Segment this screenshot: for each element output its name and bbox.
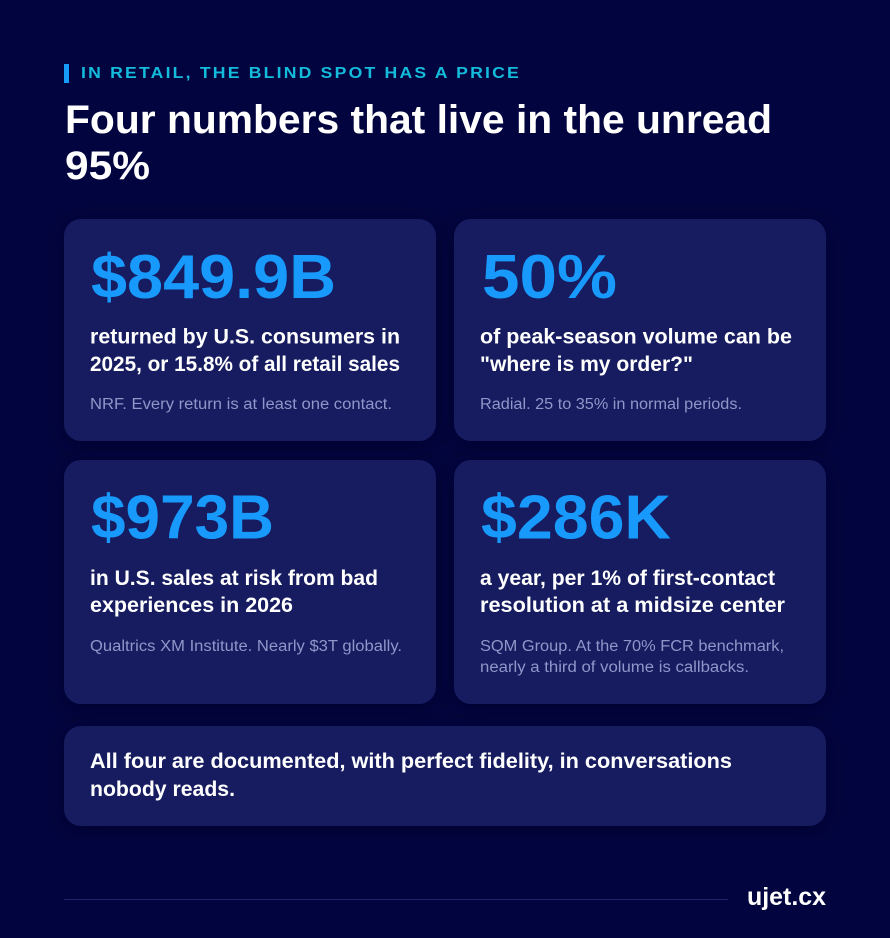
stat number: $849.9B bbox=[91, 243, 336, 312]
source note: nearly a third of volume is callbacks. bbox=[480, 659, 749, 676]
description bbox=[90, 566, 378, 617]
description: a year, per 1% of first-contact bbox=[480, 566, 775, 590]
description: in U.S. sales at risk from bad bbox=[90, 566, 378, 590]
source note: Radial. 25 to 35% in normal periods. bbox=[480, 396, 742, 413]
source note bbox=[480, 638, 784, 676]
source note: NRF. Every return is at least one contact. bbox=[90, 396, 392, 413]
panel: closing statement: nobody reads. bbox=[90, 777, 235, 801]
title: 95% bbox=[65, 144, 150, 188]
title bbox=[65, 98, 772, 188]
stat number: 50% bbox=[482, 243, 617, 312]
source note: SQM Group. At the 70% FCR benchmark, bbox=[480, 638, 784, 655]
description bbox=[480, 324, 792, 376]
panel: returns stat bbox=[64, 219, 436, 441]
panel: closing statement: All four are documented, with perfect fidelity, in conversations bbox=[90, 749, 732, 773]
description: of peak-season volume can be bbox=[480, 324, 792, 348]
description: resolution at a midsize center bbox=[480, 593, 786, 617]
panel: closing statement bbox=[64, 726, 826, 826]
panel: peak-season stat bbox=[454, 219, 826, 441]
description: "where is my order?" bbox=[480, 352, 693, 376]
stat number: $286K bbox=[481, 484, 671, 552]
logo: ujet.cx bbox=[747, 883, 826, 911]
stat number: $973B bbox=[91, 484, 274, 552]
description: returned by U.S. consumers in bbox=[90, 324, 400, 348]
description bbox=[90, 324, 400, 376]
description bbox=[480, 566, 786, 617]
eyebrow: IN RETAIL, THE BLIND SPOT HAS A PRICE bbox=[81, 65, 521, 82]
title: Four numbers that live in the unread bbox=[65, 98, 772, 142]
description: 2025, or 15.8% of all retail sales bbox=[90, 352, 400, 376]
panel: sales at risk stat bbox=[64, 460, 436, 704]
source note: Qualtrics XM Institute. Nearly $3T globally. bbox=[90, 638, 402, 655]
panel: first-contact resolution stat bbox=[454, 460, 826, 704]
description: experiences in 2026 bbox=[90, 593, 293, 617]
